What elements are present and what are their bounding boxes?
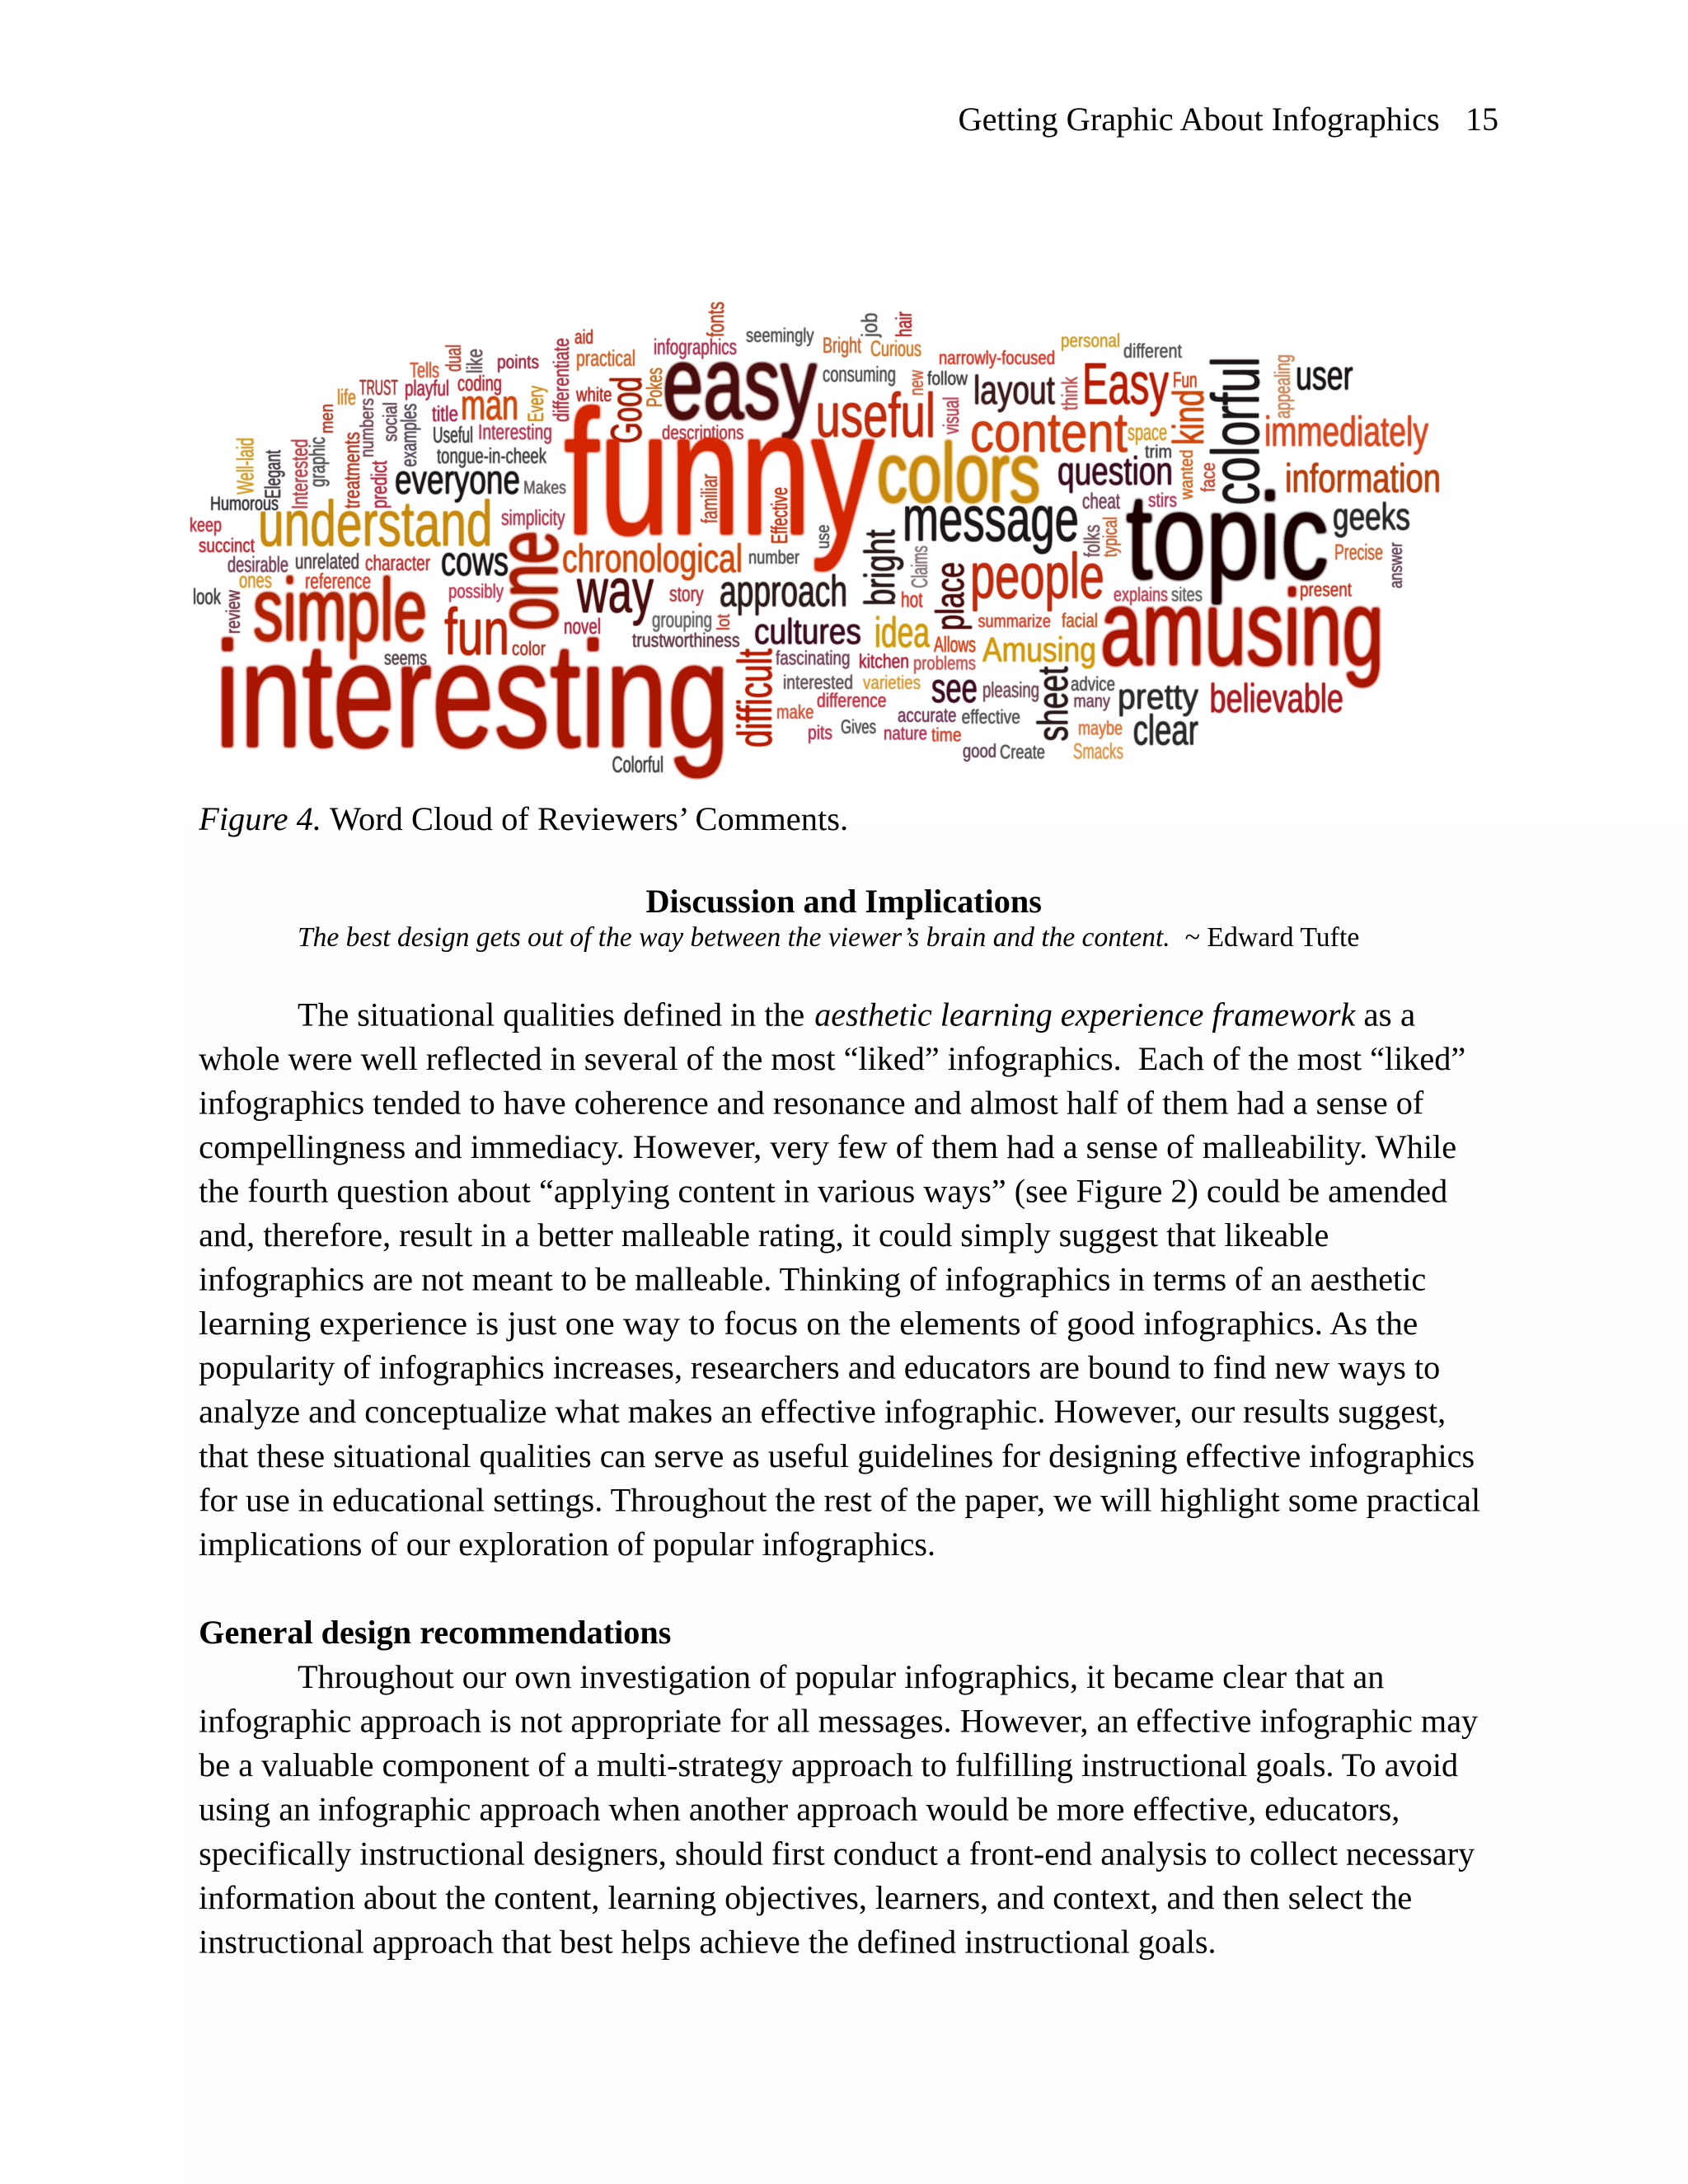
word cloud figure: advice [1071,673,1115,696]
word cloud figure: content [970,401,1128,464]
body paragraph: design recommendations: be a valuable component of a multi-strategy approach to fulfilling instructional goals. To avoid [199,1746,1458,1783]
word cloud figure: practical [576,345,635,371]
word cloud figure: predict [367,461,392,509]
word cloud figure: playful [405,376,449,401]
word cloud figure: people [970,539,1104,612]
word cloud figure: stirs [1148,490,1177,512]
word cloud figure: nature [884,722,927,743]
word cloud figure: coding [457,373,502,396]
word cloud figure: Colorful [612,752,663,777]
body paragraph: design recommendations: Throughout our own investigation of popular infographics, it became clear that an [298,1658,1384,1695]
word cloud figure: Makes [523,477,566,498]
word cloud figure: Easy [1082,352,1169,417]
word cloud figure: differentiate [549,338,574,422]
word cloud figure: maybe [1078,718,1123,740]
word cloud figure: bright [856,529,904,606]
word cloud figure: narrowly-focused [939,347,1055,368]
epigraph quote: The best design gets out of the way between the viewer’s brain and the content. [298,922,1170,953]
word cloud figure: idea [874,609,930,657]
word cloud figure: ones [239,568,272,593]
word cloud figure: title [432,403,458,426]
word cloud figure: colors [877,425,1040,520]
word cloud figure: immediately [1264,408,1428,455]
word cloud figure: Interesting [478,421,552,444]
word cloud figure: Effective [767,487,792,544]
word cloud figure: sites [1171,583,1203,607]
word cloud figure: social [379,402,402,442]
word cloud figure: space [1128,419,1167,446]
word cloud figure: problems [913,653,976,674]
word cloud figure: Create [1000,742,1045,763]
body paragraph: situational qualities [199,996,1480,1563]
word cloud figure: treatments [340,432,364,509]
word cloud figure: interested [783,672,853,694]
word cloud figure: pretty [1118,677,1198,717]
word cloud figure: Useful [433,422,473,448]
word cloud figure: amusing [1100,568,1384,688]
word cloud figure: hair [891,312,917,337]
figure caption: Figure 4. [198,800,321,837]
word cloud figure: Amusing [982,630,1096,669]
epigraph quote: ~ Edward Tufte [1185,922,1359,953]
body paragraph: design recommendations: instructional approach that best helps achieve the defined instructional goals. [199,1924,1217,1961]
word cloud figure: colorful [1198,357,1273,505]
word cloud figure: chronological [562,537,743,581]
body paragraph: situational qualities: as a [1363,996,1416,1033]
word cloud figure: typical [1100,517,1122,557]
word cloud figure: seems [384,648,427,670]
word cloud figure: points [497,351,539,373]
word cloud figure: kitchen [859,651,909,673]
word cloud figure: trustworthiness [632,630,740,652]
word cloud figure: cultures [754,612,861,652]
word cloud figure: trim [1145,442,1172,462]
word cloud figure: visual [939,397,964,434]
word cloud figure: examples [396,404,421,466]
word cloud figure: white [575,384,612,406]
word cloud figure: aid [574,326,593,349]
heading: discussion and implications: Discussion and Implications [645,883,1042,920]
word cloud figure: review [223,590,245,634]
word cloud figure: fonts [703,302,729,337]
word cloud figure: Bright [823,333,861,358]
word cloud figure: look [193,584,222,609]
word cloud figure: pleasing [982,679,1039,702]
word cloud figure: reference [305,570,371,593]
word cloud figure: Claims [907,546,932,588]
word cloud figure: Allows [934,632,976,657]
word cloud figure: cheat [1082,489,1120,513]
word cloud figure: Good [603,377,651,443]
word cloud figure: desirable [227,552,288,577]
body paragraph: situational qualities: whole were well reflected in several of the most “liked” infographics. Each of the most “liked” [199,1040,1465,1077]
word cloud figure: personal [1061,330,1120,351]
word cloud figure: varieties [863,672,921,693]
word cloud figure: Precise [1334,540,1383,565]
word cloud figure: folks [1080,524,1104,557]
body paragraph: situational qualities: popularity of infographics increases, researchers and educators are bound to find new ways to [199,1348,1440,1386]
word cloud figure: question [1057,450,1173,494]
word cloud figure: dual [443,344,466,372]
word cloud figure: difficult [729,649,782,748]
body paragraph: situational qualities: compellingness and immediacy. However, very few of them had a sense of malleability. While [199,1128,1456,1165]
body paragraph: design recommendations: using an infographic approach when another approach would be more effective, educators, [199,1791,1400,1828]
word cloud figure: Gives [841,716,876,738]
body paragraph: situational qualities: infographics are not meant to be malleable. Thinking of infographics in terms of an aesthetic [199,1260,1426,1298]
word cloud figure: simplicity [501,507,565,530]
word cloud figure: Pokes [642,368,667,407]
running header with page number: Getting Graphic About Infographics [958,101,1440,138]
running header with page number: 15 [1465,101,1498,138]
word cloud figure: useful [816,381,935,451]
word cloud figure: infographics [654,335,737,359]
body paragraph: situational qualities: learning experience is just one way to focus on the elements of good infographics. As the [199,1305,1418,1342]
body paragraph: design recommendations: information about the content, learning objectives, learners, and context, and then select the [199,1879,1412,1916]
body paragraph: situational qualities: for use in educational settings. Throughout the rest of the paper, we will highlight some practical [199,1481,1480,1518]
word cloud figure: man [461,382,518,429]
word cloud figure: Well-laid [232,438,259,494]
word cloud figure: understand [258,487,493,560]
word cloud figure: seemingly [746,325,814,347]
word cloud figure: unrelated [295,551,359,574]
word cloud figure: pits [808,722,832,744]
word cloud figure: consuming [823,363,896,387]
word cloud figure: geeks [1333,494,1410,537]
word cloud figure: character [365,552,430,575]
word cloud figure: follow [927,368,968,389]
body paragraph: situational qualities: The situational qualities defined in the [298,996,804,1033]
word cloud figure: difference [817,690,887,712]
word cloud figure: Smacks [1073,738,1123,763]
word cloud figure: job [857,313,882,338]
body paragraph: design recommendations [199,1658,1478,1961]
word cloud figure: Curious [870,336,921,361]
word cloud figure: sheet [1029,666,1077,742]
word cloud figure: one [479,531,576,630]
word cloud figure: keep [190,514,222,537]
word cloud figure: Humorous [210,493,279,515]
word cloud figure: interesting [215,611,729,779]
word cloud figure: present [1300,579,1352,602]
word cloud figure: fascinating [776,648,851,670]
word cloud figure: Every [523,386,548,422]
word cloud figure: explains [1114,583,1168,607]
word cloud figure: number [748,546,799,568]
body paragraph: situational qualities: infographics tended to have coherence and resonance and almost half of them had a sense of [199,1084,1424,1122]
word cloud figure: funny [564,373,874,572]
word cloud figure: layout [973,368,1055,413]
word cloud figure: new [906,370,928,396]
word cloud figure: clear [1133,707,1198,755]
word cloud figure: appealing [1270,354,1295,419]
word cloud figure: lot [713,614,734,630]
word cloud figure: Elegant [260,450,285,499]
word cloud figure: fun [444,595,509,668]
word cloud figure: think [1057,376,1082,410]
word cloud figure: many [1073,691,1110,711]
word cloud figure: facial [1062,610,1098,632]
body paragraph: situational qualities: and, therefore, result in a better malleable rating, it could simply suggest that likeable [199,1216,1329,1254]
word cloud figure: effective [962,706,1020,729]
word cloud figure: grouping [652,607,712,632]
word cloud figure: hot [901,589,923,612]
word cloud figure: story [669,583,704,607]
word cloud figure: wanted [1176,449,1197,500]
body paragraph: situational qualities: implications of our exploration of popular infographics. [199,1526,935,1563]
word cloud figure: message [903,482,1079,555]
word cloud figure: men [316,404,337,434]
word cloud figure: descriptions [662,422,743,444]
word cloud figure: like [462,349,487,373]
word cloud figure: Interested [287,438,312,509]
word cloud figure: TRUST [359,377,398,400]
word cloud figure: information [1285,457,1441,501]
word cloud figure: topic [1126,469,1329,605]
body paragraph: situational qualities: that these situational qualities can serve as useful guidelines for designing effective infographics [199,1437,1475,1474]
word cloud figure: accurate [898,705,956,727]
word cloud figure: easy [663,326,817,441]
subheading: general design recommendations: General design recommendations [199,1614,671,1651]
word cloud figure: cows [441,538,509,584]
word cloud figure: good [963,740,996,762]
word cloud figure: kind [1165,389,1213,445]
body paragraph: situational qualities: aesthetic learning experience framework [814,996,1357,1033]
word cloud figure: numbers [356,398,377,457]
word cloud figure: summarize [978,611,1051,631]
body paragraph: design recommendations: infographic approach is not appropriate for all messages. However, an effective infographic may [199,1702,1478,1739]
word cloud figure: graphic [305,437,330,487]
word cloud figure: color [512,638,546,660]
figure caption: Word Cloud of Reviewers’ Comments. [330,800,848,837]
word cloud figure: succinct [199,535,255,557]
word cloud figure: everyone [395,457,520,503]
word cloud figure: Fun [1173,368,1197,392]
word cloud figure: time [931,724,962,745]
word cloud figure: place [929,562,973,630]
body paragraph: design recommendations: specifically instructional designers, should first conduct a front-end analysis to collect necessary [199,1835,1475,1872]
word cloud figure: novel [564,614,601,639]
word cloud figure: face [1198,462,1220,492]
word cloud figure: believable [1210,677,1343,721]
word cloud figure: see [931,665,978,711]
word cloud figure [190,302,1441,779]
word cloud figure: use [813,524,833,549]
word cloud figure: possibly [448,580,504,603]
body paragraph: situational qualities: analyze and conceptualize what makes an effective infographic. However, our results suggest, [199,1393,1446,1430]
word cloud figure: Tells [410,359,439,382]
body paragraph: situational qualities: the fourth question about “applying content in various ways” (see Figure 2) could be amended [199,1172,1447,1210]
word cloud figure: answer [1386,542,1406,588]
word cloud figure: simple [253,560,427,659]
word cloud figure: way [576,556,654,626]
word cloud figure: approach [720,566,847,616]
word cloud figure: familiar [696,474,722,523]
word cloud figure: different [1123,340,1182,363]
word cloud figure: tongue-in-cheek [437,445,546,468]
word cloud figure: make [776,701,814,724]
word cloud figure: life [337,385,356,410]
word cloud figure: user [1296,353,1353,399]
